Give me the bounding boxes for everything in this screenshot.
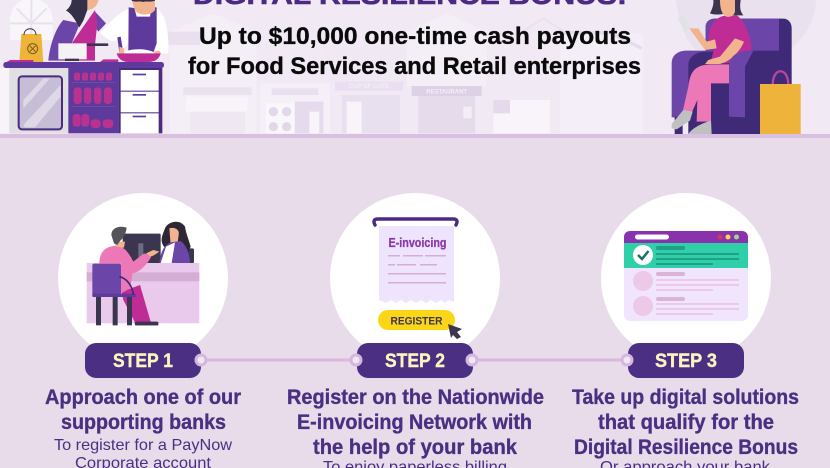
step 2 pill: STEP 2 [385,351,445,372]
chef worker [100,0,168,54]
mixing bowl [117,49,161,62]
chair seat and legs [92,277,136,325]
step 2 text: Register on the Nationwide [287,386,544,409]
subtitle: Up to $10,000 one-time cash payouts [199,23,631,50]
step 2 text: the help of your bank [313,436,517,459]
display shelf [68,68,118,133]
receipt [374,219,457,303]
step 3 text: Take up digital solutions [572,386,799,409]
oven [0,68,68,133]
receipt: E-invoicing [388,236,446,250]
icon: cursor [448,324,462,339]
subtitle [188,23,641,80]
register button [378,310,455,330]
step 3 pill: STEP 3 [655,351,717,372]
browser window [624,231,748,321]
step 1 text [45,386,241,468]
armrest [729,51,753,117]
step 1 circle with bank counter illustration [58,193,228,363]
pot [58,43,108,61]
step 2 pill [357,343,473,378]
backdrop: right arch [676,0,816,50]
step 3 circle with web page illustration [601,193,771,363]
step 2 text: E-invoicing Network with [297,411,532,434]
connector nodes [196,355,632,365]
step 3 text: Digital Resilience Bonus [574,436,798,459]
faint shopfront backdrop: RESTAURANT [426,89,467,95]
illustration: woman on armchair with phone [672,0,801,134]
paper bag [19,29,43,62]
step 2 text [287,386,544,468]
connector: step 1 to step 2 [201,358,356,362]
step 1 pill [85,343,201,378]
armchair [672,19,792,134]
step 1 text: To register for a PayNow [54,437,232,454]
step 1 text: Approach one of our [45,386,241,409]
faint shopfront backdrop: CUP OF CAFE [349,84,389,90]
step 3 pill [628,343,744,378]
step 3 text: that qualify for the [598,411,774,434]
step 1 pill: STEP 1 [113,351,173,372]
subtitle: for Food Services and Retail enterprises [188,53,641,80]
faint shopfront backdrop [120,13,643,133]
register button: REGISTER [390,316,443,328]
clerk [159,222,194,263]
header divider [0,134,830,138]
person [672,0,752,134]
drawers [118,68,162,133]
desk [87,263,199,323]
illustration: food stall counter with two workers [0,0,168,133]
shopping bag [760,71,801,134]
icon: check mark [633,245,653,265]
woman worker [48,0,106,61]
connector: step 2 to step 3 [473,358,628,362]
customer [99,227,159,325]
step 3 text [572,386,799,468]
step 2 circle with e-invoice illustration [330,193,500,363]
chair back [92,264,121,296]
background: header band [0,0,830,134]
monitor [123,234,161,263]
step 1 text: supporting banks [61,411,226,434]
counter top [3,59,164,68]
background: steps area [0,138,830,468]
window arch [10,0,53,40]
